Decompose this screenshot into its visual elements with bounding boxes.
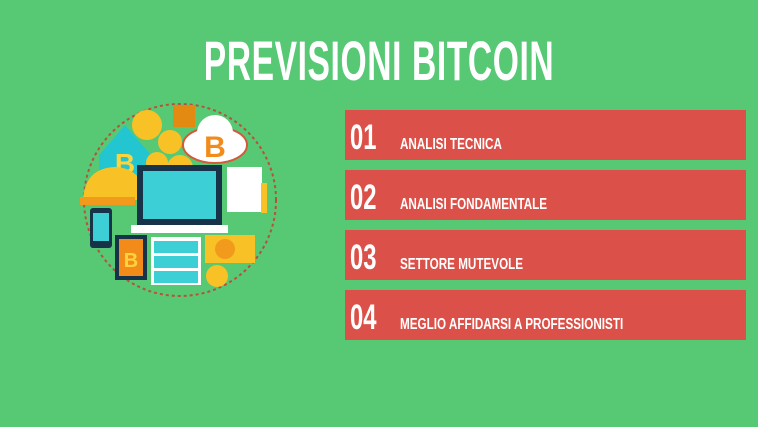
list item 04 [345,290,746,340]
list item 02 [345,170,746,220]
list item 04: 04 [350,298,376,337]
list item 01: 01 [350,118,376,157]
icon: server [151,237,201,285]
icon: tablet [115,235,147,280]
list item 01: ANALISI TECNICA [400,136,502,153]
list item 03: SETTORE MUTEVOLE [400,256,523,273]
icon: phone [90,208,112,248]
list item 02: 02 [350,178,376,217]
list item 03: 03 [350,238,376,277]
illustration: bitcoin circle [80,103,277,297]
icon: banknote [205,235,255,287]
title: PREVISIONI BITCOIN [204,29,554,92]
list item 02: ANALISI FONDAMENTALE [400,196,547,213]
icon: scroll and key [227,167,267,213]
icon: cloud [183,115,247,164]
icon: cloud: B [204,131,226,164]
icon: coins [132,105,195,181]
list item 03 [345,230,746,280]
icon: laptop [131,165,228,233]
icon: helmet [80,167,147,205]
icon: tablet: B [124,250,138,272]
icon: house: B [115,148,135,179]
list item 01 [345,110,746,160]
list item 04: MEGLIO AFFIDARSI A PROFESSIONISTI [400,316,623,333]
icon: house [99,125,151,185]
